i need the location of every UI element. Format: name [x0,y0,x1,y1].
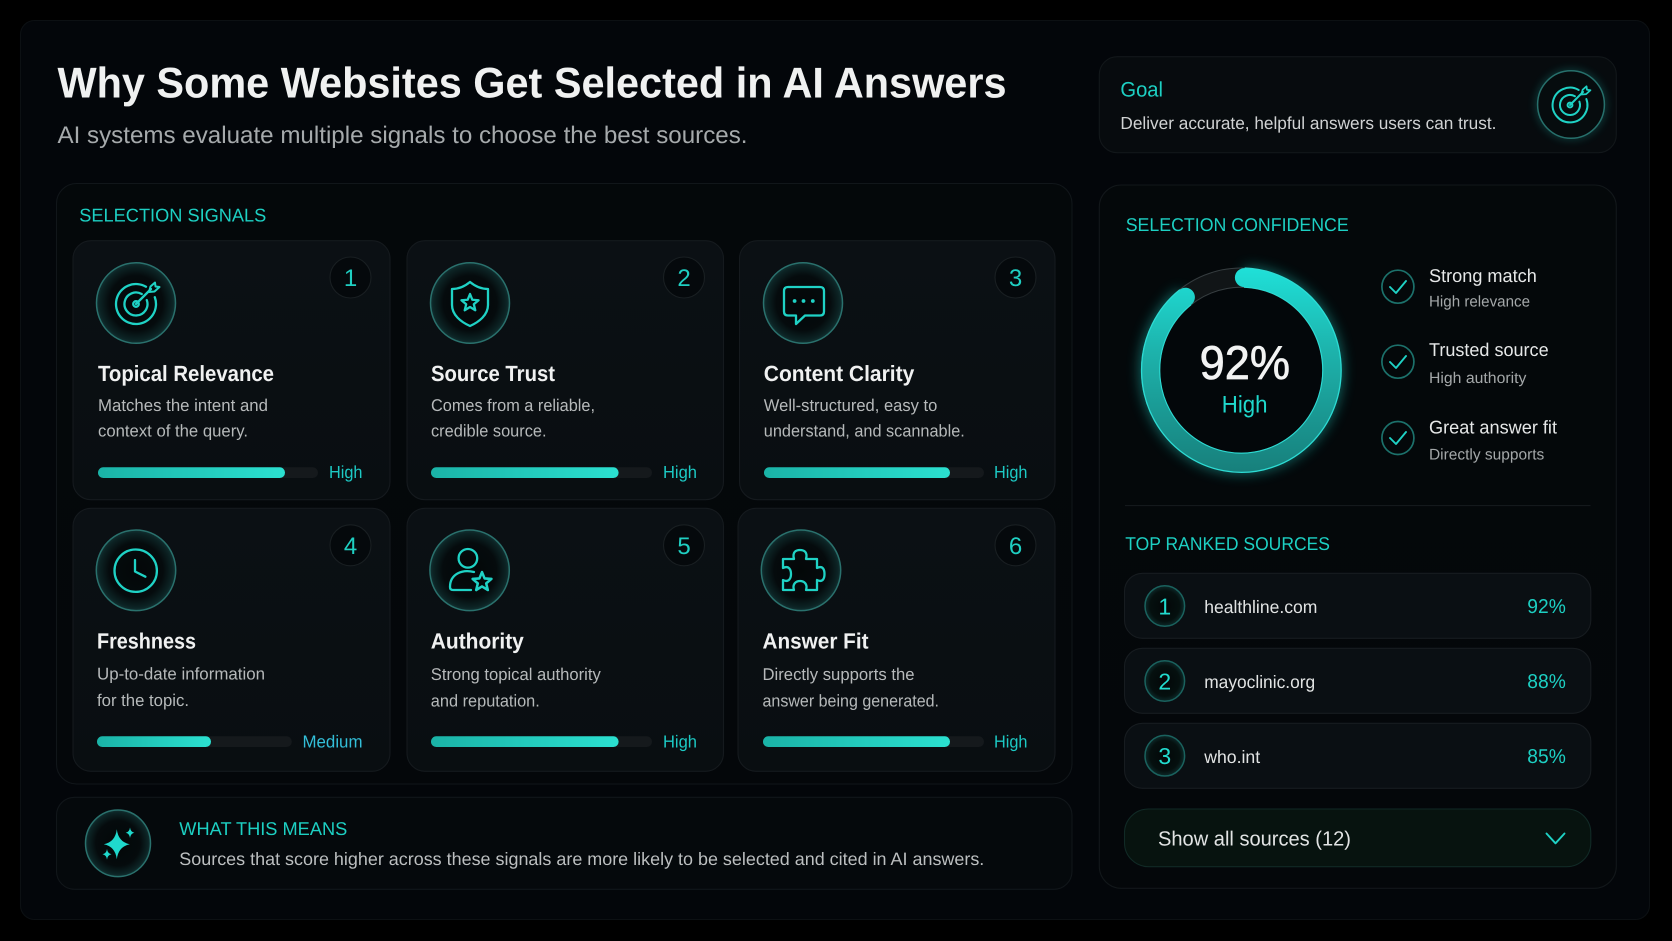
level bar: high [763,732,1028,752]
card description: context of the query. [98,422,248,441]
number badge 3: 3 [1009,265,1022,292]
card description: Matches the intent and [98,396,268,415]
check item: strong match [1382,265,1537,311]
source row 3 [1124,723,1591,788]
card description: Directly supports the [762,665,914,684]
level bar: high [431,732,697,752]
number badge 1: 1 [344,265,357,292]
source row 1: healthline.com [1204,597,1317,617]
level bar: high [764,462,1028,482]
source row 1: 92% [1527,596,1566,618]
card description: Comes from a reliable, [431,396,595,415]
icon: clock [96,530,176,611]
card description: Well-structured, easy to [764,396,937,415]
check item: trusted source [1382,339,1549,387]
icon: person with star [430,530,509,611]
level bar: high [98,462,362,482]
card description [431,396,595,441]
number badge 2 [664,257,704,298]
check item: strong match: Strong match [1429,265,1537,286]
source row 3: who.int [1203,747,1260,767]
card description: and reputation. [431,692,540,711]
number badge 6 [995,525,1036,566]
check item: trusted source: High authority [1429,370,1527,387]
card 5: authority [407,508,724,771]
explanation text: Sources that score higher across these signals are more likely to be selected and cited in AI answers. [179,849,984,869]
button: show all sources [1124,809,1591,867]
heading: selection signals: SELECTION SIGNALS [79,205,266,226]
number badge 4: 4 [344,533,357,560]
source row 2 [1124,648,1591,713]
card title: Freshness [97,628,196,653]
number badge 1 [330,257,371,298]
panel: confidence and sources [1099,185,1616,888]
goal text: Deliver accurate, helpful answers users can trust. [1120,113,1496,133]
card description: for the topic. [97,691,189,710]
check item: strong match: High relevance [1429,294,1530,311]
icon: chat bubble [764,263,842,343]
card description [762,665,939,711]
confidence level: High [1222,392,1268,419]
source row 2: 88% [1527,671,1566,693]
heading: what this means: WHAT THIS MEANS [179,818,347,839]
check item: trusted source: Trusted source [1429,339,1549,360]
number badge 2: 2 [677,265,691,292]
number badge 4 [330,525,371,566]
source row 2: mayoclinic.org [1204,672,1315,692]
card description [97,664,265,710]
check item: great answer fit [1382,416,1557,464]
card description [98,396,268,441]
icon: sparkles [86,810,150,877]
level bar: medium [97,732,362,752]
level bar: high [431,462,697,482]
card description: Strong topical authority [431,665,601,684]
check item: great answer fit: Great answer fit [1429,416,1557,437]
level bar: high: High [663,462,697,482]
level bar: high: High [329,462,362,482]
card description: answer being generated. [762,692,939,711]
icon: puzzle piece [761,530,841,611]
card description [764,396,965,441]
card description [431,665,601,711]
card description: credible source. [431,422,547,441]
card title: Topical Relevance [98,361,274,386]
donut chart: 92% [1141,268,1341,472]
panel: goal [1099,57,1616,153]
card title: Content Clarity [764,361,915,386]
goal heading: Goal [1120,79,1163,102]
heading: top ranked sources: TOP RANKED SOURCES [1125,533,1330,554]
source row 3: 3 [1158,743,1171,769]
heading: selection confidence: SELECTION CONFIDENCE [1126,214,1349,235]
icon: target [96,263,176,343]
icon: chevron down [1546,834,1564,843]
card 3: content clarity [740,241,1055,500]
number badge 3 [995,257,1036,298]
number badge 5 [664,525,704,566]
level bar: high: High [994,732,1028,752]
source row 1 [1124,573,1591,638]
card 6: answer fit [738,508,1055,771]
card description: understand, and scannable. [764,422,965,441]
check item: great answer fit: Directly supports [1429,446,1545,464]
number badge 6: 6 [1009,533,1022,560]
card 4: freshness [73,508,390,771]
number badge 5: 5 [677,533,691,560]
source row 3: 85% [1527,746,1566,768]
card title: Answer Fit [762,628,869,653]
card 1: topical relevance [73,241,390,500]
subtitle: AI systems evaluate multiple signals to choose the best sources. [58,122,748,149]
title: Why Some Websites Get Selected in AI Answers [58,60,1006,108]
card description: Up-to-date information [97,664,265,683]
button: show all sources: Show all sources (12) [1158,828,1351,851]
icon: shield [430,263,510,343]
card title: Source Trust [431,361,556,386]
icon: goal target [1535,68,1607,140]
panel: selection signals [56,184,1072,784]
level bar: high: High [994,462,1028,482]
percentage value: 92% [1200,337,1290,390]
source row 2: 2 [1158,668,1171,694]
source row 1: 1 [1158,593,1171,619]
level bar: medium: Medium [302,732,362,752]
card title: Authority [431,628,525,653]
level bar: high: High [663,732,697,752]
panel: what this means [56,797,1072,889]
card 2: source trust [407,241,724,500]
